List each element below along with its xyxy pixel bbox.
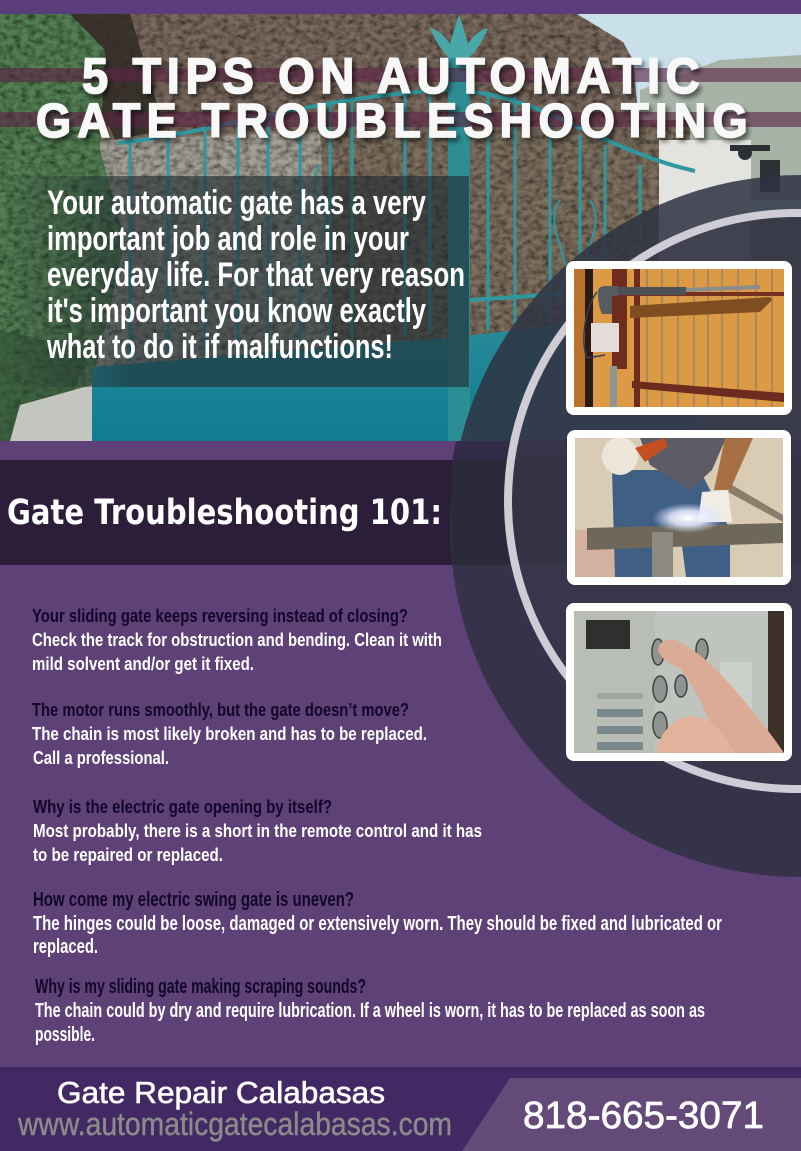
spark glow [652,503,724,533]
intro text: what to do it if malfunctions! [46,328,393,366]
left glove [602,437,638,475]
title bands [0,68,801,127]
tip 2 [32,699,427,768]
sky [577,14,801,212]
card: gate motor photo [566,261,792,415]
tip 2: The motor runs smoothly, but the gate doesn’t move? [32,699,409,720]
tip 3 [33,796,482,865]
speaker slots [597,693,643,750]
house wall [90,132,330,370]
motor head [598,286,618,314]
cable [584,292,605,358]
stone base [10,385,92,441]
plank lines [647,269,772,407]
arm [714,438,753,490]
lighter plate [720,662,752,712]
footer phone panel [462,1078,801,1151]
tip 4 [33,889,722,958]
bare bushes behind gate [290,120,690,340]
tip 5: Why is my sliding gate making scraping sounds? [35,976,366,998]
white ring [508,213,801,789]
jeans [612,470,730,577]
black post [585,269,593,407]
title: GATE TROUBLESHOOTING [36,94,748,147]
title [36,49,748,147]
control box [591,323,619,352]
tip 2: The chain is most likely broken and has to be replaced. [32,723,427,744]
hedge dark lower [0,330,90,441]
lantern [730,145,780,192]
tip 3: Why is the electric gate opening by itself? [33,796,332,817]
tip 1: Your sliding gate keeps reversing instead of closing? [32,605,408,626]
beam [587,523,783,550]
heading: Gate Troubleshooting 101: [7,493,442,533]
circle over heading band [451,460,801,565]
intro text: important job and role in your [47,220,409,258]
finger [658,640,784,753]
hedge [0,14,125,441]
back rail [728,485,783,522]
footer phone number: 818-665-3071 [523,1095,764,1137]
top purple strip [0,0,801,14]
tip 5 [35,976,705,1046]
tiled roof [70,14,640,138]
intro text: Your automatic gate has a very [47,184,426,222]
teal gate panel [92,325,562,441]
dark circle [450,175,801,877]
finial leaves [430,28,488,58]
intro text [46,184,465,366]
top rail [625,292,784,296]
tip 3: Most probably, there is a short in the remote control and it has [33,820,482,841]
card: welding photo [567,430,791,585]
intro text: it's important you know exactly [47,292,426,330]
tip 1: Check the track for obstruction and bending. Clean it with [32,629,442,650]
vertical post [652,532,673,577]
dark door edge [768,611,784,753]
purple band below the photo [0,441,801,460]
card: keypad photo [566,603,792,761]
tip 1 [32,605,442,674]
post finial [450,14,468,50]
footer company name: Gate Repair Calabasas [57,1075,385,1110]
circle over purple strip [452,441,801,460]
title: 5 TIPS ON AUTOMATIC [82,49,700,104]
right glove [698,490,732,522]
hero photo: teal gate in front of a house [0,14,801,441]
vest [640,438,726,490]
tip 3: to be repaired or replaced. [33,844,223,865]
circle over lower purple area [453,565,801,877]
footer background [0,1067,801,1151]
pole [610,366,617,407]
photo base [17,110,416,416]
arm shadow [630,297,772,318]
white pillar [659,140,751,261]
display [586,620,630,649]
tip 4: How come my electric swing gate is uneven? [33,889,354,911]
lower finger and hand [656,716,735,753]
brown posts [612,269,640,407]
inner disc of the ring [508,213,801,789]
tip 4: replaced. [33,936,98,958]
gate bars [118,90,700,362]
central gate post [448,50,470,441]
diagonal brace [632,381,784,402]
roof shadow [60,14,165,140]
tip 2: Call a professional. [33,747,169,768]
intro text: everyday life. For that very reason [47,256,465,294]
tip 5: possible. [35,1024,95,1046]
left plank [574,269,585,407]
welding torch [635,438,668,462]
ground tint [575,530,615,577]
footer website: www.automaticgatecalabasas.com [17,1106,452,1142]
intro box background [0,176,469,387]
keys [652,639,708,738]
actuator arm [616,287,686,295]
heading band [0,460,801,565]
tip 1: mild solvent and/or get it fixed. [32,653,254,674]
distant shrubs on the right [640,55,801,200]
